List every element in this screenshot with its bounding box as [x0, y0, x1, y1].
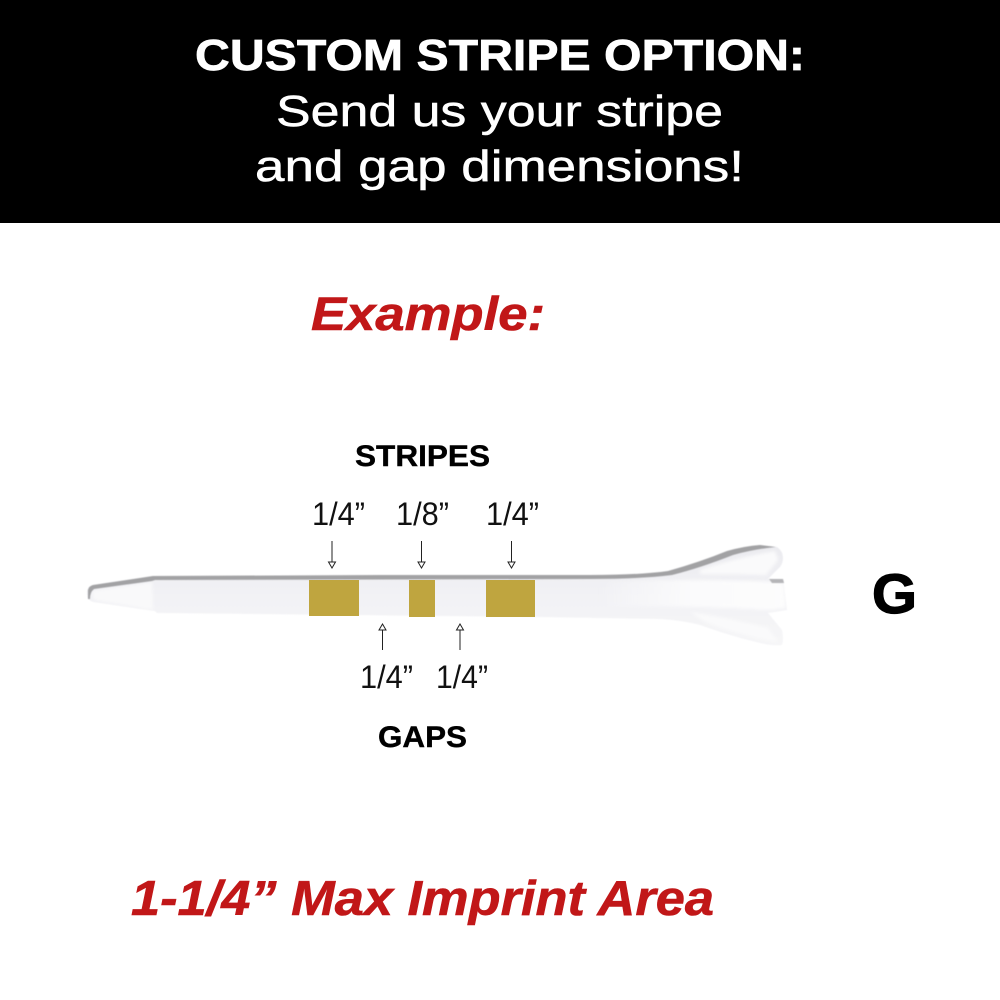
tee lower prong highlight — [690, 612, 778, 642]
tee top shadow edge — [88, 545, 776, 599]
gaps label: GAPS — [378, 721, 467, 754]
letter G: G — [872, 562, 917, 625]
tee body — [87, 546, 787, 645]
stripes label: STRIPES — [355, 440, 490, 473]
header banner — [0, 0, 1000, 223]
max imprint area caption: 1-1/4” Max Imprint Area — [131, 872, 714, 926]
arrow: gap 2 — [456, 624, 464, 650]
golf tee — [87, 545, 787, 645]
subheading line 1: Send us your stripe — [276, 87, 723, 136]
stripe dimension 3: 1/4” — [486, 496, 539, 532]
arrow: stripe 2 — [418, 541, 425, 568]
tee head notch shadow — [769, 579, 784, 583]
gold stripe 3 — [486, 580, 535, 617]
tee head glossy highlight — [600, 580, 786, 610]
gold stripe 1 — [309, 580, 359, 616]
gold stripe 2 — [409, 580, 435, 617]
subheading line 2: and gap dimensions! — [255, 142, 744, 191]
example heading: Example: — [311, 287, 545, 340]
tee upper prong highlight — [700, 551, 778, 575]
arrow: stripe 1 — [328, 541, 336, 568]
heading: custom stripe option: CUSTOM STRIPE OPTION: — [195, 31, 805, 80]
tee tip highlight — [92, 582, 153, 610]
stripe dimension 1: 1/4” — [312, 496, 365, 532]
gap dimension 2: 1/4” — [436, 659, 488, 695]
gap dimensions — [360, 659, 488, 695]
arrow: stripe 3 — [508, 541, 515, 568]
stripe dimensions — [312, 496, 539, 532]
stripe dimension 2: 1/8” — [396, 496, 449, 532]
gap dimension 1: 1/4” — [360, 659, 413, 695]
arrow: gap 1 — [379, 624, 386, 650]
